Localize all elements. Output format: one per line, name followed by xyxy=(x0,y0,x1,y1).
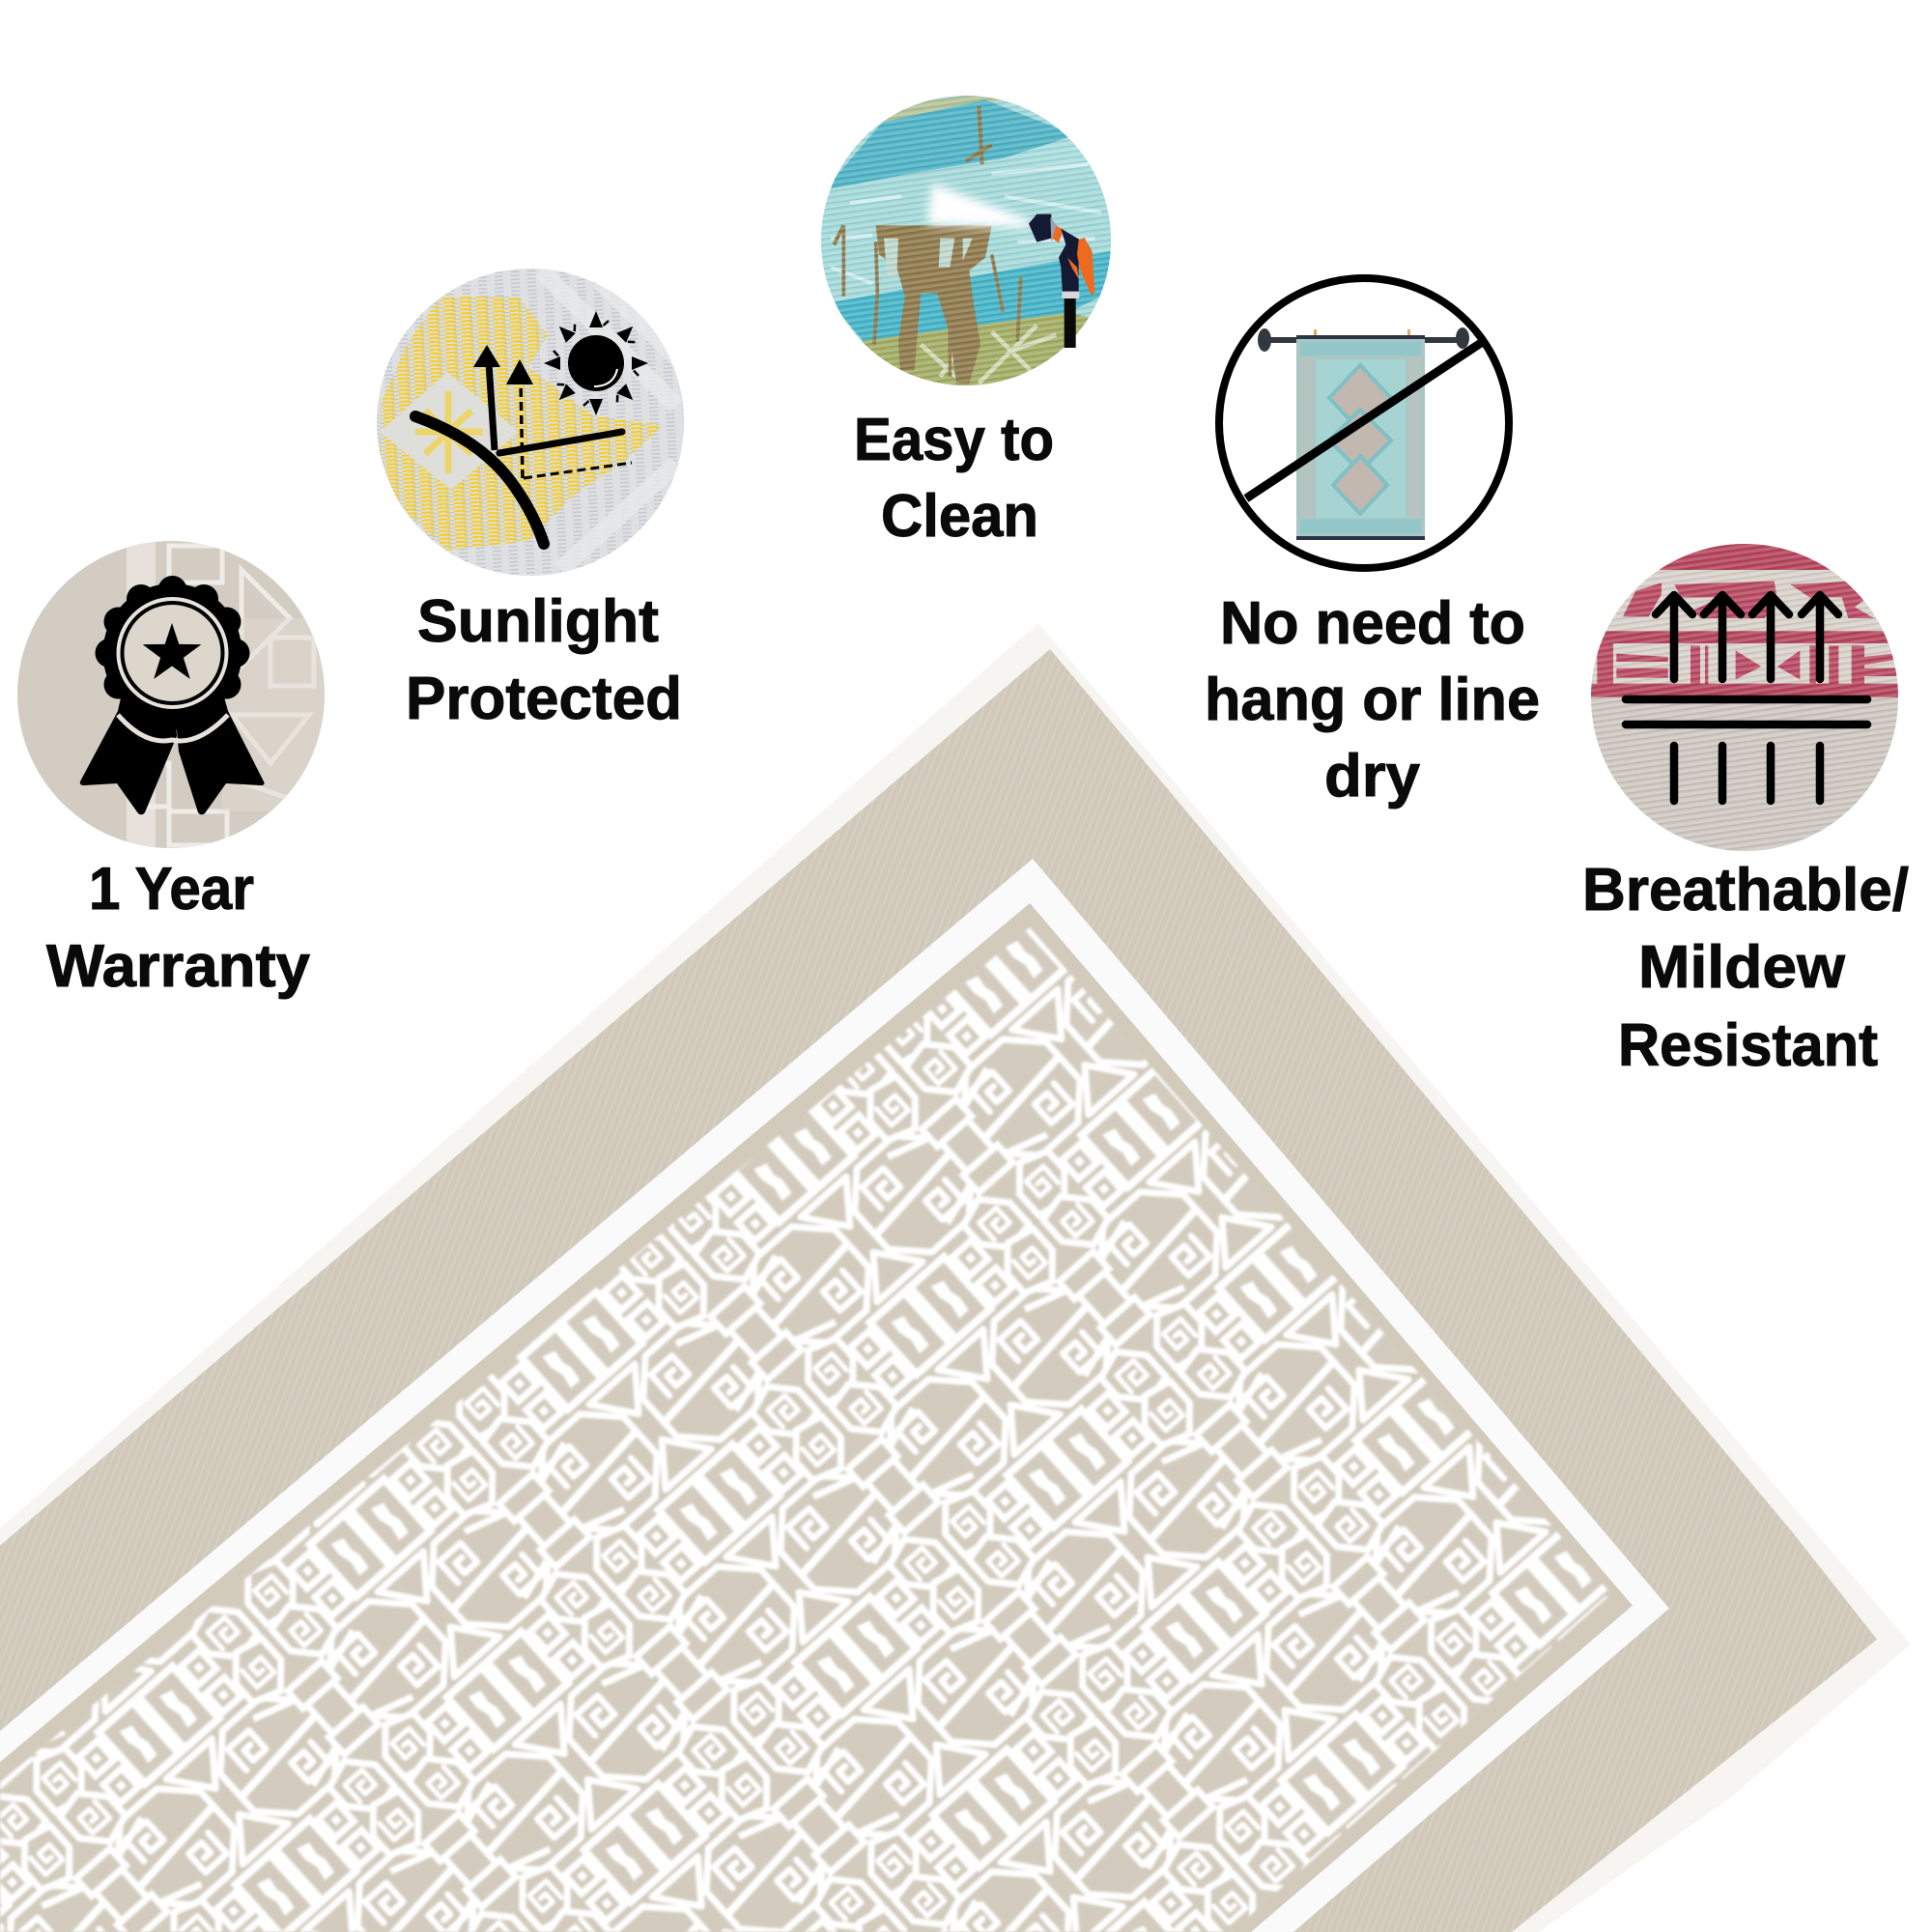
photo circle: beige rug texture xyxy=(17,541,328,850)
label: No need to hang or line dry: hang or line xyxy=(1205,667,1540,733)
icon: airflow arrows through layers xyxy=(1626,595,1867,801)
feature: sunlight protected xyxy=(377,269,686,732)
photo circle: red and cream rug texture xyxy=(1584,536,1908,860)
label: No need to hang or line dry: No need to xyxy=(1220,590,1525,657)
label: Sunlight Protected: Protected xyxy=(406,666,682,732)
icon: hose spray nozzle xyxy=(1029,214,1094,348)
icon: prohibition ring xyxy=(1219,278,1509,568)
rug product photo xyxy=(0,623,1911,1932)
photo circle: teal rug being hosed clean xyxy=(821,96,1111,385)
feature: no need to hang or line dry xyxy=(1205,278,1540,810)
rug inner beige margin xyxy=(0,903,1633,1932)
label: 1 Year Warranty: 1 Year xyxy=(89,856,254,923)
icon: hanging rug on rod xyxy=(1258,327,1469,540)
label: Breathable/ Mildew Resistant: Resistant xyxy=(1618,1012,1878,1079)
label: Sunlight Protected: Sunlight xyxy=(417,588,659,655)
label: Breathable/ Mildew Resistant: Breathable/ xyxy=(1582,857,1909,923)
rug beige border xyxy=(0,649,1877,1932)
label: Breathable/ Mildew Resistant: Mildew xyxy=(1638,934,1846,1001)
label: Easy to Clean: Easy to xyxy=(854,407,1054,473)
feature: breathable mildew resistant xyxy=(1582,536,1909,1079)
rug inner white frame xyxy=(0,859,1669,1932)
feature: 1 year warranty xyxy=(17,541,328,1000)
rug woven geometric pattern field xyxy=(0,927,1611,1932)
label: Easy to Clean: Clean xyxy=(881,483,1038,550)
icon: water spray xyxy=(927,184,1030,228)
photo circle: yellow rug texture xyxy=(377,269,686,578)
feature: easy to clean xyxy=(821,96,1111,537)
icon: award ribbon rosette xyxy=(80,576,265,814)
rug white outer edge xyxy=(0,623,1911,1932)
label: 1 Year Warranty: Warranty xyxy=(46,933,311,1000)
label: No need to hang or line dry: dry xyxy=(1324,743,1421,810)
icon: UV reflection diagram with sun xyxy=(415,311,648,544)
